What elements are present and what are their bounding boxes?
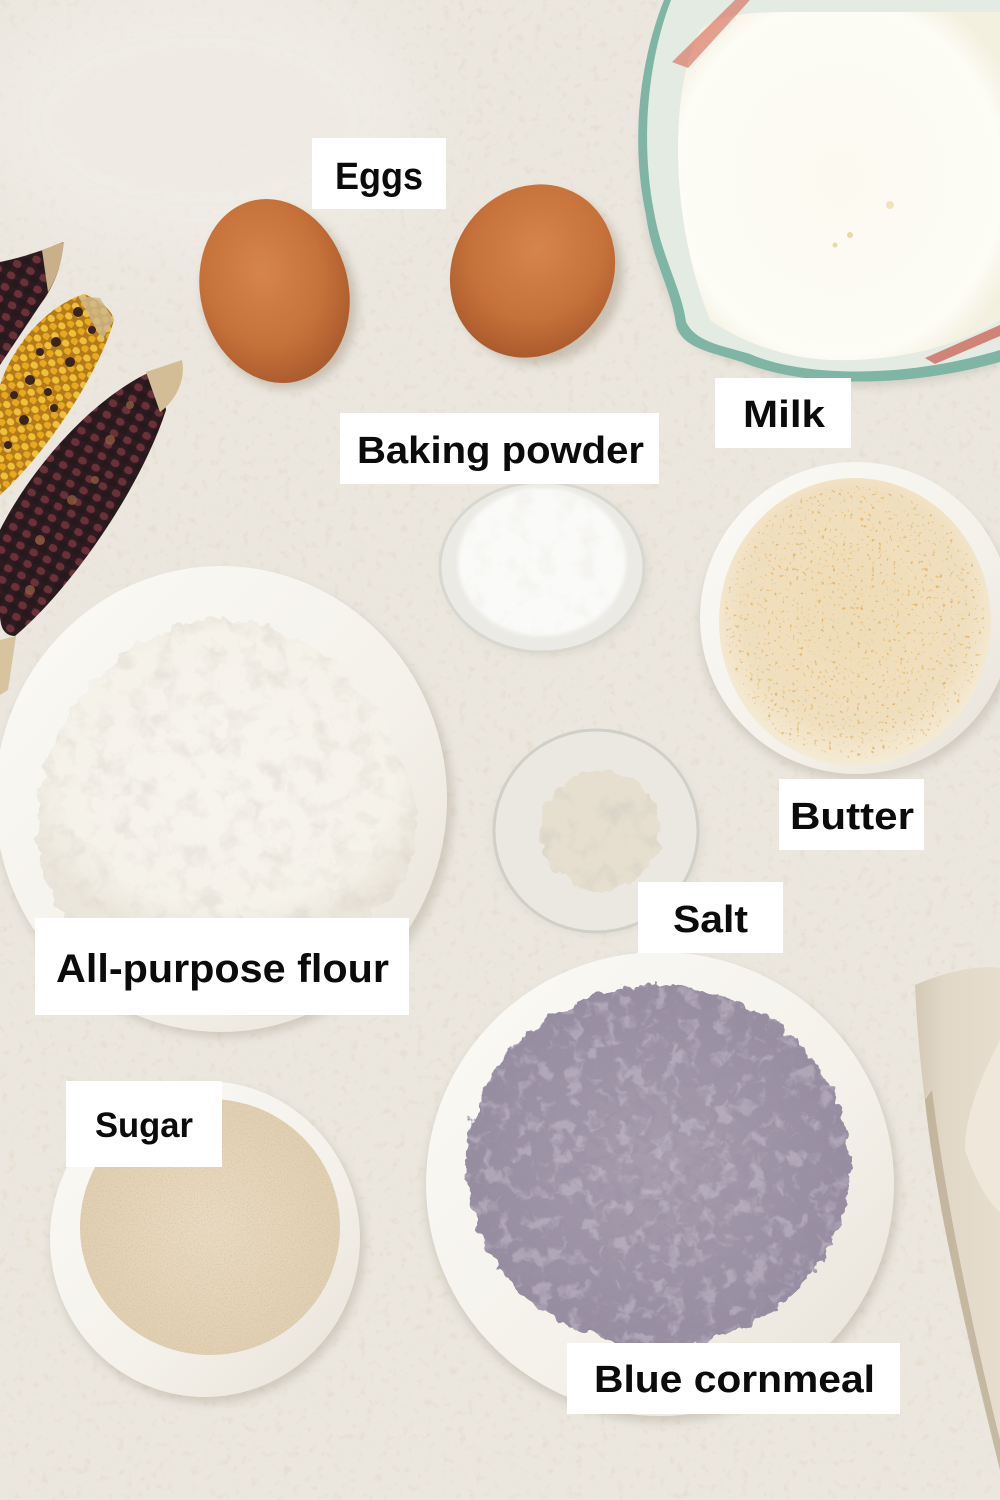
photo: salt in glass dish: [494, 730, 702, 934]
photo: milk in glass measuring cup: [638, 0, 1000, 387]
label: Eggs: Eggs: [335, 156, 423, 198]
label: All-purpose flour: All-purpose flour: [56, 947, 389, 991]
label: Baking powder: Baking powder: [357, 430, 644, 472]
photo: melted butter in white bowl: [700, 462, 1000, 780]
photo: eggs: [180, 153, 655, 407]
photo: decorative corn cobs: [0, 242, 183, 636]
label: Salt: [638, 882, 783, 953]
label: Milk: [715, 378, 851, 448]
label: All-purpose flour: [35, 918, 409, 1015]
label: Milk: Milk: [743, 394, 826, 436]
label: Butter: [779, 779, 924, 850]
label: Eggs: [312, 138, 446, 209]
label: Baking powder: [340, 413, 659, 484]
photo: sugar in white bowl: [50, 1081, 364, 1403]
label: Salt: Salt: [673, 899, 748, 941]
photo: linen napkin: [915, 967, 1000, 1470]
label: Butter: Butter: [790, 796, 914, 838]
label: Sugar: [66, 1081, 222, 1167]
photo: baking powder in glass dish: [440, 482, 648, 656]
label: Blue cornmeal: [567, 1343, 900, 1414]
photo: blue cornmeal in white bowl: [426, 952, 898, 1422]
label: Blue cornmeal: Blue cornmeal: [594, 1359, 875, 1401]
label: Sugar: Sugar: [95, 1106, 193, 1145]
photo: all-purpose flour in white bowl: [0, 566, 453, 1037]
